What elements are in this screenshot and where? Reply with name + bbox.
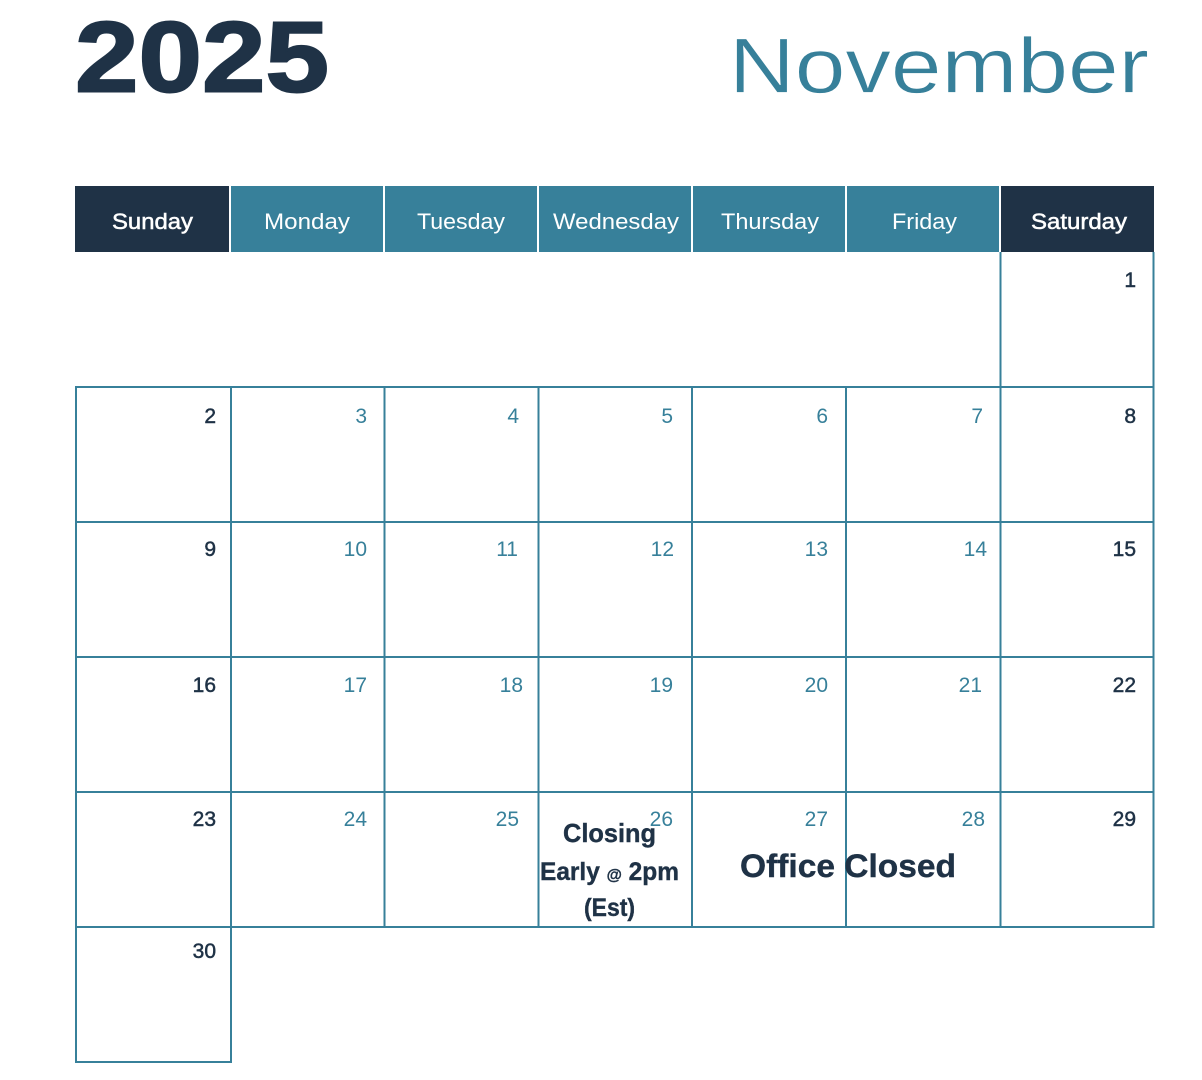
date 26: 26 [650, 808, 673, 831]
date 23: 23 [193, 808, 216, 831]
date 28: 28 [962, 808, 985, 831]
note: office closed on the 27th and 28th: Office Closed [740, 848, 956, 884]
date 22: 22 [1113, 674, 1136, 697]
date numbers [193, 269, 1136, 963]
date 1: 1 [1124, 269, 1136, 292]
header: Monday [231, 186, 383, 252]
date 30: 30 [193, 940, 216, 963]
header: Sunday: Sunday [112, 209, 193, 234]
title: year: 2025 [75, 2, 329, 114]
date 5: 5 [661, 405, 673, 428]
date 3: 3 [355, 405, 367, 428]
date 14: 14 [964, 538, 987, 561]
date 18: 18 [500, 674, 523, 697]
header: Friday: Friday [892, 209, 957, 234]
date 19: 19 [650, 674, 673, 697]
header: Thursday [693, 186, 845, 252]
header: Tuesday: Tuesday [417, 209, 505, 234]
date 27: 27 [805, 808, 828, 831]
date 8: 8 [1124, 405, 1136, 428]
date 15: 15 [1113, 538, 1136, 561]
header: Saturday: Saturday [1031, 209, 1127, 234]
date 13: 13 [805, 538, 828, 561]
date 16: 16 [193, 674, 216, 697]
date 25: 25 [496, 808, 519, 831]
date 20: 20 [805, 674, 828, 697]
header: Thursday: Thursday [721, 209, 819, 234]
date 7: 7 [971, 405, 983, 428]
date 24: 24 [344, 808, 367, 831]
date 21: 21 [959, 674, 982, 697]
header: Monday: Monday [264, 209, 350, 234]
note: closing early on the 26th: (Est) [584, 894, 635, 922]
date 4: 4 [507, 405, 519, 428]
date 17: 17 [344, 674, 367, 697]
date 11: 11 [496, 538, 518, 561]
date 6: 6 [816, 405, 828, 428]
date 9: 9 [204, 538, 216, 561]
title: month: November [729, 22, 1149, 110]
calendar grid lines [75, 252, 1154, 1062]
header: Wednesday [539, 186, 691, 252]
header: Saturday [1001, 186, 1154, 252]
date 29: 29 [1113, 808, 1136, 831]
date 12: 12 [651, 538, 674, 561]
note: closing early on the 26th: Closing [563, 818, 656, 848]
date 10: 10 [344, 538, 367, 561]
date 2: 2 [204, 405, 216, 428]
header: Sunday [75, 186, 229, 252]
weekday header row [75, 186, 1154, 252]
note: closing early on the 26th [540, 818, 679, 922]
header: Wednesday: Wednesday [553, 209, 679, 234]
note: closing early on the 26th: Early @ 2pm [540, 858, 679, 886]
header: Friday [847, 186, 999, 252]
header: Tuesday [385, 186, 537, 252]
